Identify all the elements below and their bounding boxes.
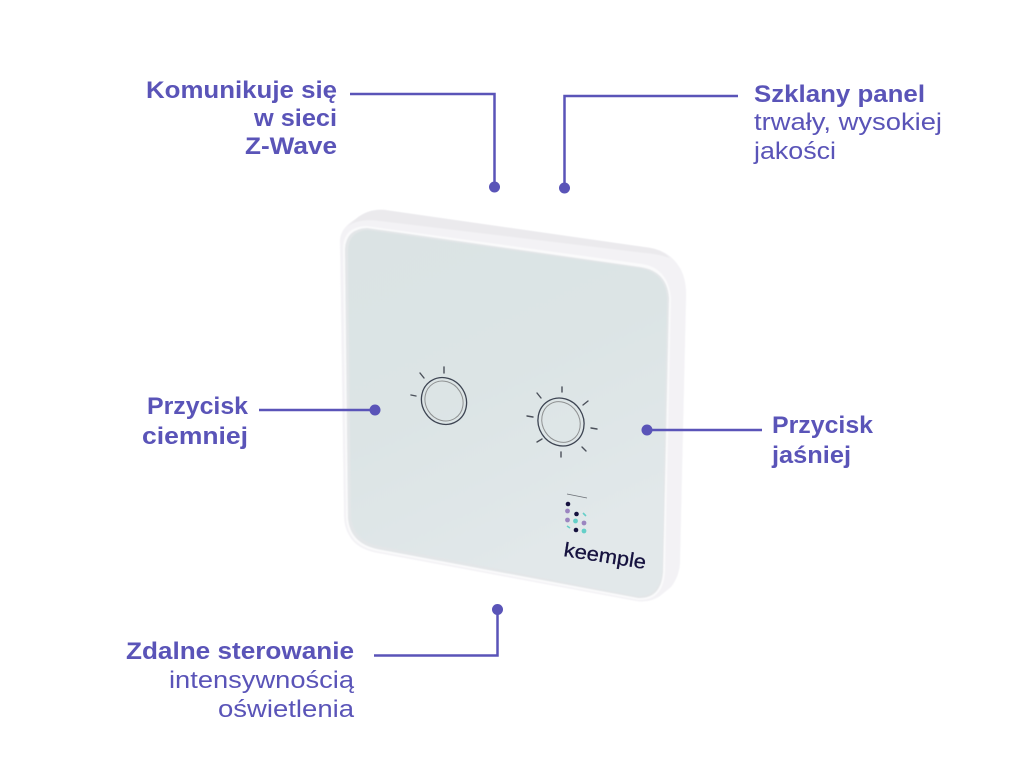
logo dots: [565, 494, 587, 533]
callout: bright button: [642, 412, 874, 469]
label: Przycisk: [147, 393, 249, 420]
label: w sieci: [253, 105, 337, 132]
label: ciemniej: [142, 423, 248, 450]
label: [126, 638, 355, 723]
logo wordmark: keemple: [562, 539, 648, 574]
label: oświetlenia: [218, 696, 355, 723]
device: wall switch: [340, 210, 686, 601]
label: [771, 412, 874, 469]
label: jaśniej: [771, 442, 851, 469]
label: Z-Wave: [245, 133, 337, 160]
device body: [340, 210, 686, 601]
device top bevel: [346, 210, 670, 258]
leader line: [647, 429, 762, 431]
icon: dim button: [411, 367, 475, 433]
callout: glass panel: [559, 81, 942, 194]
label: [142, 393, 249, 450]
label: trwały, wysokiej: [754, 109, 942, 136]
callout: dim button: [142, 393, 380, 450]
label: Szklany panel: [754, 81, 925, 108]
keemple logo: [562, 494, 648, 574]
leader line: [374, 610, 498, 656]
callout: Z-Wave: [146, 77, 500, 192]
label: Przycisk: [772, 412, 874, 439]
label: Zdalne sterowanie: [126, 638, 354, 665]
callout: remote control: [126, 604, 503, 723]
glass edge shade: [345, 228, 669, 598]
glass rim: [343, 226, 671, 600]
leader line: [259, 409, 375, 411]
glass panel: [348, 230, 667, 596]
label: intensywnością: [169, 667, 355, 694]
icon: bright button: [527, 387, 597, 457]
leader line: [564, 96, 738, 188]
label: jakości: [753, 138, 836, 165]
leader line: [350, 94, 494, 187]
label: Komunikuje się: [146, 77, 337, 104]
label: [146, 77, 337, 160]
label: [753, 81, 942, 165]
